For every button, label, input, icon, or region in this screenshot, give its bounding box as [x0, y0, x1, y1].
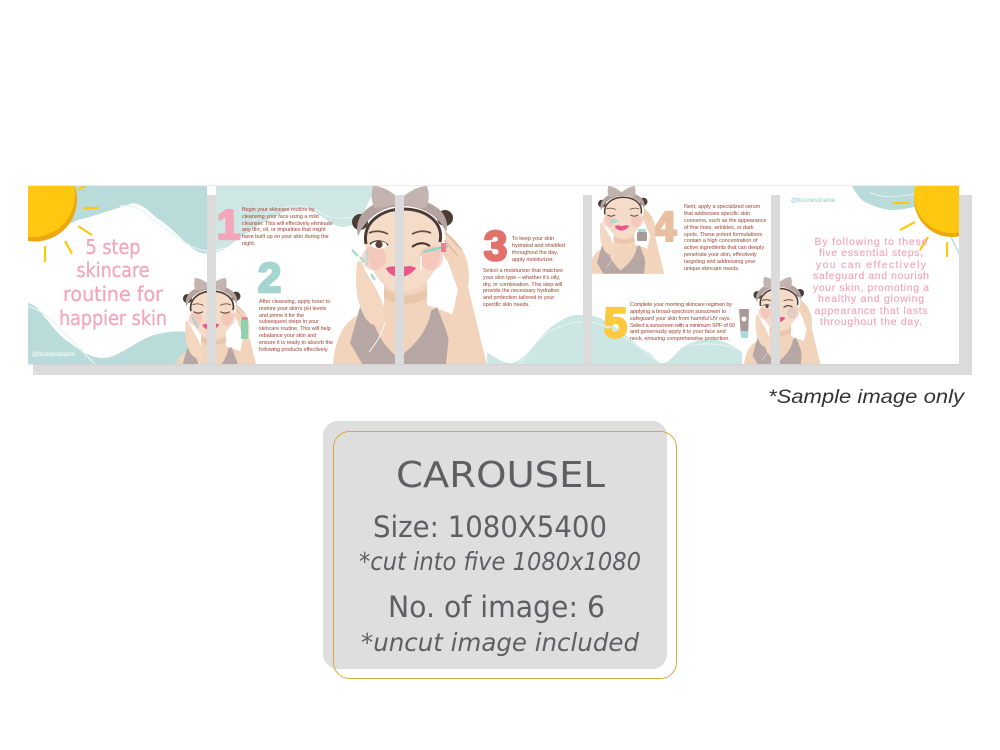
closing message: your skin, promoting a [813, 282, 929, 294]
step 1 text: Begin your skincare routine by [242, 207, 315, 213]
step 2 text: rebalance your skin and [259, 333, 316, 339]
step 4 text: spots. These potent formulations [684, 232, 762, 238]
step 1 text: have built up on your skin during the [242, 234, 329, 240]
step 4 text: active ingredients that can deeply [684, 245, 764, 251]
step 3 text: throughout the day, [512, 250, 559, 256]
step 4 text: penetrate your skin, effectively [684, 252, 757, 258]
closing message: throughout the day. [820, 316, 922, 328]
closing message: you can effectively [816, 259, 927, 271]
carousel artwork [28, 186, 959, 364]
step 5 text: Complete your morning skincare regimen by [630, 302, 732, 308]
top wave panel 1 [69, 186, 207, 254]
step 5 text: applying a broad-spectrum sunscreen to [630, 309, 726, 315]
step 2 text: following products effectively. [259, 347, 329, 353]
cut note: *cut into five 1080x1080 [359, 547, 641, 576]
closing message [813, 236, 929, 328]
step 4 text: Next, apply a specialized serum [684, 204, 761, 210]
step 2 text: ensure it is ready to absorb the [259, 340, 333, 346]
step 2 text [259, 299, 333, 353]
step 3 text: specific skin needs. [483, 302, 530, 308]
title: skincare [76, 258, 150, 282]
closing message: appearance that lasts [814, 305, 928, 317]
closing message: By following to these [814, 236, 928, 248]
step 2 text: restore your skin's pH levels [259, 306, 327, 312]
card background [323, 421, 667, 669]
cut gaps between slides [207, 195, 780, 365]
title: routine for [63, 282, 164, 306]
step 1 text [242, 207, 333, 247]
handle right: @businessname [791, 198, 836, 204]
step 3 text [483, 236, 565, 308]
step 2 text: subsequent steps in your [259, 319, 319, 325]
step 5 text: neck, ensuring comprehensive protection. [630, 336, 730, 342]
step 2 text: skincare routine. This will help [259, 326, 331, 332]
step 4 text [684, 204, 766, 272]
closing message: five essential steps, [819, 247, 923, 259]
title [59, 235, 167, 330]
step 5 text: Select a sunscreen with a minimum SPF of 50 [630, 323, 735, 329]
step 4 text: unique skincare needs. [684, 266, 739, 272]
step 4 text: that addresses specific skin [684, 211, 750, 217]
step 4 text: contain a high concentration of [684, 238, 758, 244]
card heading: CAROUSEL [396, 455, 605, 496]
uncut note: *uncut image included [361, 628, 639, 657]
info card [323, 421, 676, 678]
step 3 text: To keep your skin [512, 236, 554, 242]
step 3 text: apply moisturizer. [512, 257, 554, 263]
step 2 text: After cleansing, apply toner to [259, 299, 330, 305]
step 3 text: your skin type – whether it's oily, [483, 275, 561, 281]
step 1 text: cleanser. This will effectively eliminate [242, 221, 333, 227]
step 4 text: of fine lines, wrinkles, or dark [684, 225, 754, 231]
top wave panel 2 [208, 186, 378, 253]
woman with sunscreen tube [739, 277, 821, 366]
step 1 text: night. [242, 241, 255, 247]
step 3 text: hydrated and shielded [512, 243, 565, 249]
number 2: 2 [258, 254, 281, 301]
number 3: 3 [484, 222, 507, 269]
woman with toner bottle [176, 278, 256, 364]
step 4 text: concerns, such as the appearance [684, 218, 766, 224]
carousel preview strip [28, 185, 972, 375]
number 4: 4 [653, 203, 677, 250]
step 3 text: Select a moisturizer that matches [483, 268, 563, 274]
large woman with serum dropper [333, 186, 487, 365]
step 4 text: targeting and addressing your [684, 259, 756, 265]
title: 5 step [86, 235, 140, 259]
strip drop shadow [33, 195, 972, 375]
closing message: healthy and glowing [818, 293, 924, 305]
step 5 text: safeguard your skin from harmful UV rays. [630, 316, 731, 322]
sample image note: *Sample image only [768, 387, 966, 408]
step 1 text: any dirt, oil, or impurities that might [242, 227, 326, 233]
top wave right panel [852, 186, 915, 210]
white notch above first gap [207, 186, 216, 195]
sun right [893, 186, 959, 257]
number 1: 1 [217, 201, 240, 248]
step 3 text: dry, or combination. This step will [483, 282, 562, 288]
step 2 text: and prime it for the [259, 313, 304, 319]
step 5 text [630, 302, 735, 342]
step 3 text: and protection tailored to your [483, 295, 555, 301]
step 1 text: cleansing your face using a mild [242, 214, 319, 220]
sun left [28, 186, 99, 262]
step 3 text: provide the necessary hydration [483, 288, 559, 294]
closing message: safeguard and nourish [813, 270, 929, 282]
bottom wave panel 1 [28, 303, 200, 364]
woman applying cream [589, 186, 664, 274]
bottom wave right panels [487, 315, 742, 364]
card gold outline [334, 432, 676, 678]
step 5 text: and generously apply it to your face and [630, 329, 726, 335]
number 5: 5 [604, 299, 627, 346]
size line: Size: 1080X5400 [373, 510, 607, 544]
handle left: @businessname [32, 352, 76, 358]
title: happier skin [59, 306, 167, 330]
image count: No. of image: 6 [388, 590, 605, 624]
